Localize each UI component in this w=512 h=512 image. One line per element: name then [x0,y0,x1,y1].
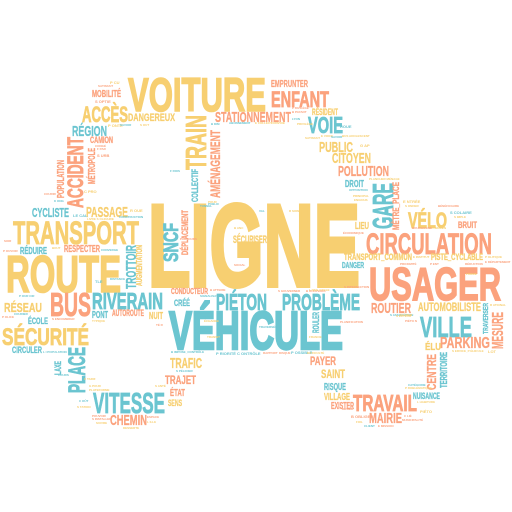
word: PUBLIC: PUBLIC [319,139,353,156]
tiny background words: DESSERTE [123,426,139,430]
word: MAIRIE: MAIRIE [369,410,402,427]
word: GARE (vertical): GARE [368,183,400,229]
tiny background words: P ONTE [108,123,123,128]
tiny background words: CONVERGE [101,248,118,252]
tiny background words: B PAYANT [292,110,307,114]
word: RÉSIDENT: RÉSIDENT [312,107,338,117]
tiny background words: C OÛT [79,398,88,403]
tiny background words: SATISFAIT [305,136,320,140]
word: TERRITOIRE (vertical): TERRITOIRE [439,352,450,388]
tiny background words: ENGRAIS [354,198,368,202]
word: BUS: BUS [50,286,91,323]
tiny background words: F ROIS [170,169,180,173]
tiny background words: SUIVRE [96,421,107,425]
word: RÉDUIRE: RÉDUIRE [20,244,47,257]
word: TRAFIC: TRAFIC [170,355,202,372]
word: MOBILITÉ: MOBILITÉ [92,87,121,100]
tiny background words: S GOUVERNER [278,289,301,293]
tiny background words: MUNICIPALITÉ [402,417,423,422]
tiny background words: ABONNEMENT [229,121,251,125]
word: TRAJET: TRAJET [165,373,196,387]
word: NUIT: NUIT [149,311,163,322]
tiny background words: K ONG [54,199,64,203]
word: ACCÈS: ACCÈS [82,102,128,127]
tiny background words: G AP [360,143,370,148]
word: STATIONNEMENT: STATIONNEMENT [215,109,291,126]
word: TRANSPORT: TRANSPORT [13,215,139,251]
word: ÉLU: ÉLU [425,340,441,353]
word: CRÉÉ: CRÉÉ [174,298,190,308]
tiny background words: POUR [208,200,218,204]
tiny background words: S ENCOMBRER [52,317,75,321]
tiny background words: PROXIMITÉ [400,261,417,266]
tiny background words: B IMPOSE_CONTRÔLE [171,349,204,354]
word: LIEU: LIEU [355,221,369,232]
tiny background words: DISTANCE [110,277,125,281]
word: RIVERAIN: RIVERAIN [92,288,163,314]
tiny background words: E COLLECT [255,121,272,125]
word: CITOYEN: CITOYEN [332,150,371,167]
tiny background words: BOURGOGNE [412,226,432,230]
word: DÉPLACEMENT (vertical): DÉPLACEMENT [180,210,190,255]
tiny background words: B OULEVARD [306,289,326,293]
tiny background words: E MISSION [378,424,394,428]
tiny background words: S COLAIRE [450,210,472,215]
tiny background words: PARCOURS [180,237,197,241]
word: VILLE: VILLE [420,312,472,344]
tiny background words: CONVOIE [271,121,285,125]
tiny background words: DISQUE [279,351,291,355]
tiny background words: P OSSIBLE [291,350,313,355]
word: VOIE: VOIE [308,112,343,138]
tiny background words: S INTERSECTION [344,285,369,289]
word: TRAVERSER (vertical): TRAVERSER [483,303,490,334]
word: POPULATION (vertical): POPULATION [56,160,67,198]
tiny background words: SAVOIR [120,123,132,127]
tiny background words: P OUR CIR [19,294,35,298]
tiny background words: E NTRÉE [403,199,421,204]
word: ÉCOLE: ÉCOLE [28,316,48,326]
word: AUGMENTATION (vertical): AUGMENTATION [135,245,144,286]
tiny background words: ROUE [340,124,352,129]
tiny background words: E INSTITUT [413,255,430,259]
word: CONDUCTEUR: CONDUCTEUR [171,287,208,296]
tiny background words: ÉCONOMIQUE [343,230,364,235]
tiny background words: OPPOSITION [349,188,368,192]
tiny background words: CONGÉ [95,143,106,148]
tiny background words: F PAR [97,147,107,151]
word: MÉTROPOLE (vertical): MÉTROPOLE [85,148,98,184]
tiny background words: L I POPULATION [43,350,67,354]
word: VITESSE: VITESSE [93,388,165,420]
tiny background words: ESPACE [147,415,159,419]
tiny background words: C PRO [84,189,97,194]
tiny background words: S OUT [140,123,149,127]
tiny background words: RAPPORT [263,351,278,355]
tiny background words: S ANTÉ [155,383,166,388]
word: SAINT: SAINT [321,367,345,381]
tiny background words: COURIR [44,192,57,196]
tiny background words [2,80,511,430]
tiny background words: FLÂNER [400,312,413,317]
word: PASSAGE: PASSAGE [86,204,128,221]
word: POLLUTION: POLLUTION [338,163,389,180]
tiny background words: LYON [292,117,300,121]
tiny background words: FORME [466,272,477,276]
tiny background words: SATISFAIT [98,84,113,88]
word: MESURE (vertical): MESURE [490,312,507,349]
tiny background words: P CU [110,80,120,85]
word: LIGNE: LIGNE [148,180,360,311]
word: SENS: SENS [168,398,182,408]
tiny background words: G POUR [89,384,102,388]
tiny background words: POUVOIR [92,414,107,418]
tiny background words: SOIR [4,239,12,243]
word: DANGEREUX: DANGEREUX [128,112,175,124]
tiny background words: VAL [259,209,265,213]
word: EMPRUNTER: EMPRUNTER [271,79,308,90]
tiny background words: RÉDUCTION [465,261,483,266]
tiny background words: B DIM [211,122,220,126]
word: DROIT: DROIT [345,179,364,190]
word: NUISANCE: NUISANCE [413,391,440,401]
tiny background words: TLE [95,279,103,284]
tiny background words: PRIVILÈGE [297,121,313,126]
tiny background words: S ERVICE_P ÉHICULE [452,348,484,353]
word: TROTTOIR (vertical): TROTTOIR [123,245,140,289]
tiny background words: S ONDER [405,204,420,208]
word: ÉTAT: ÉTAT [170,386,185,399]
word: EXISTER: EXISTER [331,401,354,412]
word: PARKING: PARKING [440,335,490,352]
tiny background words: S IMPLE [454,215,466,219]
word: SNCF (vertical): SNCF [160,223,183,262]
tiny background words: PUBLIC [208,202,220,206]
tiny background words: FRANCE [309,335,322,339]
tiny background words: P RIVILÈGE [292,105,309,110]
tiny background words: BUS ADOLESCENT [342,134,370,138]
word: ROUTE: ROUTE [6,246,121,304]
tiny background words: P ENT [430,262,439,266]
tiny background words: DIFFICULTÉ [307,350,324,355]
word: VÉLO: VÉLO [408,208,447,233]
word: CENTRE (vertical): CENTRE [424,354,439,390]
tiny background words: PLATEFORME [89,388,109,392]
tiny background words: CATÉGORIE [408,382,426,387]
word: CHEMIN: CHEMIN [110,412,147,429]
tiny background words: B OBLIGER [351,414,373,419]
word: CIRCULER: CIRCULER [12,345,42,355]
word: TRAIN (vertical): TRAIN [181,115,213,170]
tiny background words: B ANC [234,226,244,230]
tiny background words: S URB [97,153,110,158]
tiny background words: S OPTIE [95,99,111,104]
tiny background words: COURIER [14,312,29,316]
word: DANGER: DANGER [342,261,364,270]
word: AMÉNAGEMENT (vertical): AMÉNAGEMENT [207,130,223,198]
tiny background words: PLANCHER MÉNAGE [369,176,400,181]
tiny background words: R OUE [130,208,143,213]
word: RISQUE: RISQUE [324,382,346,393]
word: ENFANT: ENFANT [271,87,329,112]
word: VOITURE: VOITURE [128,68,266,121]
word: RESPECTER: RESPECTER [64,244,100,255]
tiny background words: PIÉTO [420,409,432,414]
word: MÈTRE_PLACE (vertical): MÈTRE_PLACE [391,182,401,230]
tiny background words: TYPIQUE [92,319,105,323]
tiny background words: P ROBLÉMATIQUE [405,385,432,390]
tiny background words: S INSTALLER [92,417,112,421]
word: SÉCURISER: SÉCURISER [233,233,267,246]
tiny background words: R SOIN [289,209,299,213]
tiny background words: S TATION [77,405,91,409]
tiny background words: PIÉTO N [405,318,417,323]
word: RÉSEAU: RÉSEAU [4,300,42,315]
tiny background words: E DÉPARTEMENT [485,259,511,264]
tiny background words: TRAVERSÉE [259,324,277,329]
tiny background words: LOT [488,349,497,354]
word: TRAVAIL: TRAVAIL [353,390,417,416]
tiny background words: CLIENT [364,424,375,428]
tiny background words: E VOICE [321,134,333,138]
tiny background words: P OLICE [2,315,14,319]
word: CAMION: CAMION [90,135,113,145]
tiny background words: LE CAL [73,213,88,218]
tiny background words: TRANSIT [207,335,220,339]
word: PONT: PONT [92,310,108,321]
tiny background words: BÉNÉFICIAIRE [438,203,459,208]
tiny background words: DÉVIER [342,406,354,411]
word: PIÉTON: PIÉTON [216,288,267,315]
tiny background words: S PÉLICIER [176,368,194,373]
tiny background words: COURS [58,373,69,377]
word: LAXE (vertical): LAXE [53,361,63,375]
tiny background words: SOCIAL [234,263,246,267]
word: VILLAGE: VILLAGE [324,392,350,403]
word: BRUIT: BRUIT [458,220,477,230]
word: COLLECTIF (vertical): COLLECTIF [190,169,200,202]
tiny background words: C LIÉ [404,413,412,418]
tiny background words: MOYEN [435,226,446,230]
word: PROBLÈME: PROBLÈME [282,288,360,315]
tiny background words: L ILLE [147,420,156,424]
tiny background words: L OEIL CYCLE [309,288,330,292]
word: ROULER (vertical): ROULER [311,312,321,333]
tiny background words: SAVOIR [331,135,343,139]
tiny background words: CONSTRUCTION [119,215,143,219]
word: RÉGION: RÉGION [72,123,107,140]
tiny background words: S ASSOCIATION [390,313,413,317]
tiny background words: P RIORITÉ C ONTRÔLE [216,351,261,356]
tiny background words: SIGNALISATION [200,294,223,298]
tiny background words: LIVRE S OLIDAIRE [87,217,114,221]
tiny background words: BOUT [52,246,61,250]
tiny background words: TÉ R [156,322,164,327]
tiny background words: PLANIFICATION [340,320,363,324]
word: ROUTIER: ROUTIER [371,300,411,317]
tiny background words: B ATTERIE [210,288,226,292]
word: PAYER: PAYER [310,354,336,368]
word: PLACE (vertical): PLACE [64,347,91,393]
word: ACCIDENT (vertical): ACCIDENT [63,137,88,208]
tiny background words: TUNNEL [200,204,212,208]
tiny background words: R ATIONAL [490,303,506,307]
tiny background words: PRINCIPAL [353,194,369,198]
tiny background words: ÉCHANGE [204,318,219,323]
tiny background words: L HABITUDE [417,400,435,404]
word: PISTE_CYCLABLE: PISTE_CYCLABLE [431,252,483,262]
tiny background words: S ECTEUR [396,314,412,318]
word: TRANSPORT_COMMUN: TRANSPORT_COMMUN [344,252,412,262]
tiny background words: P OLITIQUE [485,255,502,259]
word: SÉCURITÉ: SÉCURITÉ [2,323,89,351]
word: VÉHICULE: VÉHICULE [169,301,343,361]
tiny background words: P OUVOIR [3,249,18,253]
tiny background words: FOIL [356,420,363,424]
word: CYCLISTE: CYCLISTE [32,205,69,220]
word: AUTOROUTE: AUTOROUTE [112,308,144,318]
tiny background words: C TARIF [84,377,96,381]
